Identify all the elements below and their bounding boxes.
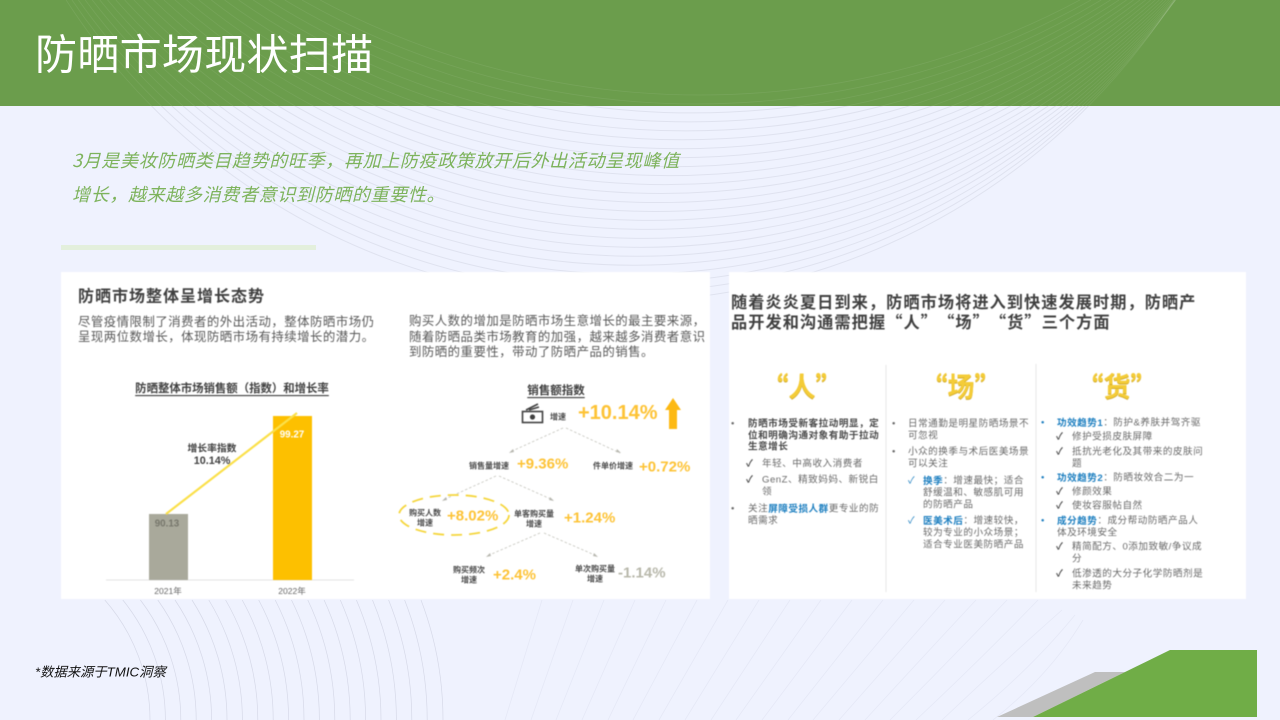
bar chart [106, 381, 354, 596]
column: people: • [731, 418, 735, 430]
column: place: • [892, 418, 896, 430]
panel heading: 三个方面 [1042, 309, 1111, 333]
driver tree: 增速 [550, 412, 566, 422]
panel: market growth [61, 272, 710, 599]
column: product: ✓ [1056, 568, 1063, 580]
bar chart: 2021年 [154, 586, 182, 596]
bar chart: 99.27 [280, 430, 305, 440]
driver tree: +0.72% [639, 458, 690, 476]
column: place [892, 366, 1029, 550]
driver tree: 单次购买量 [575, 564, 615, 574]
column: place: 日常通勤是明星防晒场景不 [908, 418, 1029, 430]
column: product: ✓ [1056, 486, 1063, 498]
column: people: 年轻、中高收入消费者 [762, 458, 863, 470]
column: place: 较为专业的小众场景； [923, 526, 1024, 538]
column: place: • [892, 446, 896, 458]
icon: up arrow [665, 398, 681, 429]
bar chart: 2022年 [278, 586, 306, 596]
column: product: 成分趋势：成分帮动防晒产品人 [1057, 514, 1198, 526]
column: product: • [1041, 516, 1045, 526]
panel heading: “货” [990, 309, 1042, 333]
title: 防晒市场现状扫描 [35, 22, 373, 82]
intro statement [72, 147, 682, 207]
column: people: 防晒市场受新客拉动明显，定 [748, 418, 879, 430]
column: product: • [1041, 418, 1045, 428]
column: place: 小众的换季与术后医美场景 [908, 446, 1029, 458]
column: people: “人” [762, 366, 842, 404]
header banner [0, 0, 1280, 106]
left description [78, 314, 374, 344]
driver tree: 销售量增速 [469, 460, 509, 470]
panel: people, place, product [729, 272, 1246, 599]
right description: 购买人数的增加是防晒市场生意增长的最主要来源， [409, 313, 705, 328]
column: place: 医美术后：增速较快， [923, 514, 1024, 526]
source footnote: *数据来源于TMIC洞察 [35, 664, 167, 680]
right description: 到防晒的重要性，带动了防晒产品的销售。 [409, 344, 654, 359]
column: product: 题 [1072, 458, 1082, 470]
column: people: 生意增长 [748, 440, 788, 452]
column: place: “场” [920, 366, 1002, 404]
driver tree: 增速 [526, 518, 542, 528]
column: place: 适合专业医美防晒产品 [923, 538, 1024, 550]
bar chart: 10.14% [194, 455, 231, 467]
column: place: 可以关注 [908, 458, 948, 470]
column: place: ✓ [908, 476, 915, 486]
left description: 尽管疫情限制了消费者的外出活动，整体防晒市场仍 [78, 314, 374, 329]
column: people [731, 366, 879, 526]
corner decoration [997, 650, 1257, 717]
column: product: 抵抗光老化及其带来的皮肤问 [1072, 446, 1203, 458]
column: people: 位和明确沟通对象有助于拉动 [748, 430, 879, 442]
driver tree: +9.36% [517, 456, 568, 472]
bar chart: 90.13 [155, 518, 180, 530]
column: product: 功效趋势1：防护&养肤并驾齐驱 [1057, 416, 1201, 428]
column: product: 修护受损皮肤屏障 [1072, 430, 1153, 442]
column: product: 功效趋势2：防晒妆效合二为一 [1057, 472, 1194, 484]
column: people: 关注屏障受损人群更专业的防 [748, 502, 879, 514]
bar chart: 增长率指数 [188, 442, 237, 454]
driver tree: 增速 [587, 574, 603, 584]
intro statement: 增长，越来越多消费者意识到防晒的重要性。 [72, 181, 445, 207]
column: product: • [1041, 472, 1045, 484]
column: product: 未来趋势 [1072, 580, 1112, 592]
right description [409, 313, 705, 359]
driver tree: +8.02% [447, 508, 498, 524]
column: people: ✓ [746, 458, 753, 470]
callout: buyers ellipse [399, 495, 509, 535]
column: product: ✓ [1056, 432, 1063, 442]
driver tree: 购买人数 [409, 508, 441, 518]
intro statement: 3月是美妆防晒类目趋势的旺季，再加上防疫政策放开后外出活动呈现峰值 [72, 147, 682, 173]
icon: cash [522, 404, 542, 422]
panel heading: “人” [886, 309, 938, 333]
column: place: 可忽视 [908, 430, 938, 442]
left description: 呈现两位数增长，体现防晒市场有持续增长的潜力。 [78, 329, 374, 344]
panel heading: 品开发和沟通需把握 [731, 309, 886, 333]
panel heading: “场” [938, 309, 990, 333]
column: people: GenZ、精致妈妈、新锐白 [762, 474, 879, 486]
column: place: 的防晒产品 [923, 498, 973, 510]
column: product: ✓ [1056, 542, 1063, 552]
column: people: 领 [762, 486, 772, 498]
column: product: 分 [1072, 554, 1082, 564]
column: product: 修颜效果 [1072, 486, 1112, 498]
column: product: 使妆容服帖自然 [1072, 500, 1143, 512]
column: product: 精简配方、0添加致敏/争议成 [1072, 540, 1202, 552]
driver tree: -1.14% [618, 564, 666, 582]
driver tree [399, 383, 690, 584]
column: product [1041, 366, 1203, 592]
panel heading: 防晒市场整体呈增长态势 [78, 286, 265, 306]
panel heading: 随着炎炎夏日到来，防晒市场将进入到快速发展时期，防晒产 [731, 289, 1196, 313]
column: product: 低渗透的大分子化学防晒剂是 [1072, 568, 1203, 580]
panel heading [731, 289, 1196, 333]
driver tree: 销售额指数 [527, 383, 585, 397]
column: place: 换季：增速最快；适合 [923, 474, 1024, 486]
column: people: 晒需求 [748, 514, 778, 526]
driver tree: 单客购买量 [514, 508, 554, 518]
driver tree: 件单价增速 [593, 460, 633, 470]
bar chart: 防晒整体市场销售额（指数）和增长率 [135, 381, 329, 395]
column: people: • [731, 504, 735, 514]
column: people: ✓ [746, 474, 753, 486]
driver tree: +2.4% [493, 566, 536, 584]
column: product: ✓ [1056, 500, 1063, 512]
column: product: 体及环境安全 [1057, 526, 1118, 538]
column: product: ✓ [1056, 446, 1063, 458]
right description: 随着防晒品类市场教育的加强，越来越多消费者意识 [409, 329, 705, 344]
column: place: ✓ [908, 516, 915, 526]
driver tree: 增速 [461, 574, 477, 584]
driver tree: 购买频次 [453, 564, 485, 574]
column: place: 舒缓温和、敏感肌可用 [923, 486, 1024, 498]
driver tree: 增速 [417, 518, 433, 528]
divider bar [61, 245, 316, 250]
column: product: “货” [1076, 366, 1158, 404]
driver tree: +1.24% [564, 510, 615, 526]
driver tree: +10.14% [578, 402, 658, 424]
